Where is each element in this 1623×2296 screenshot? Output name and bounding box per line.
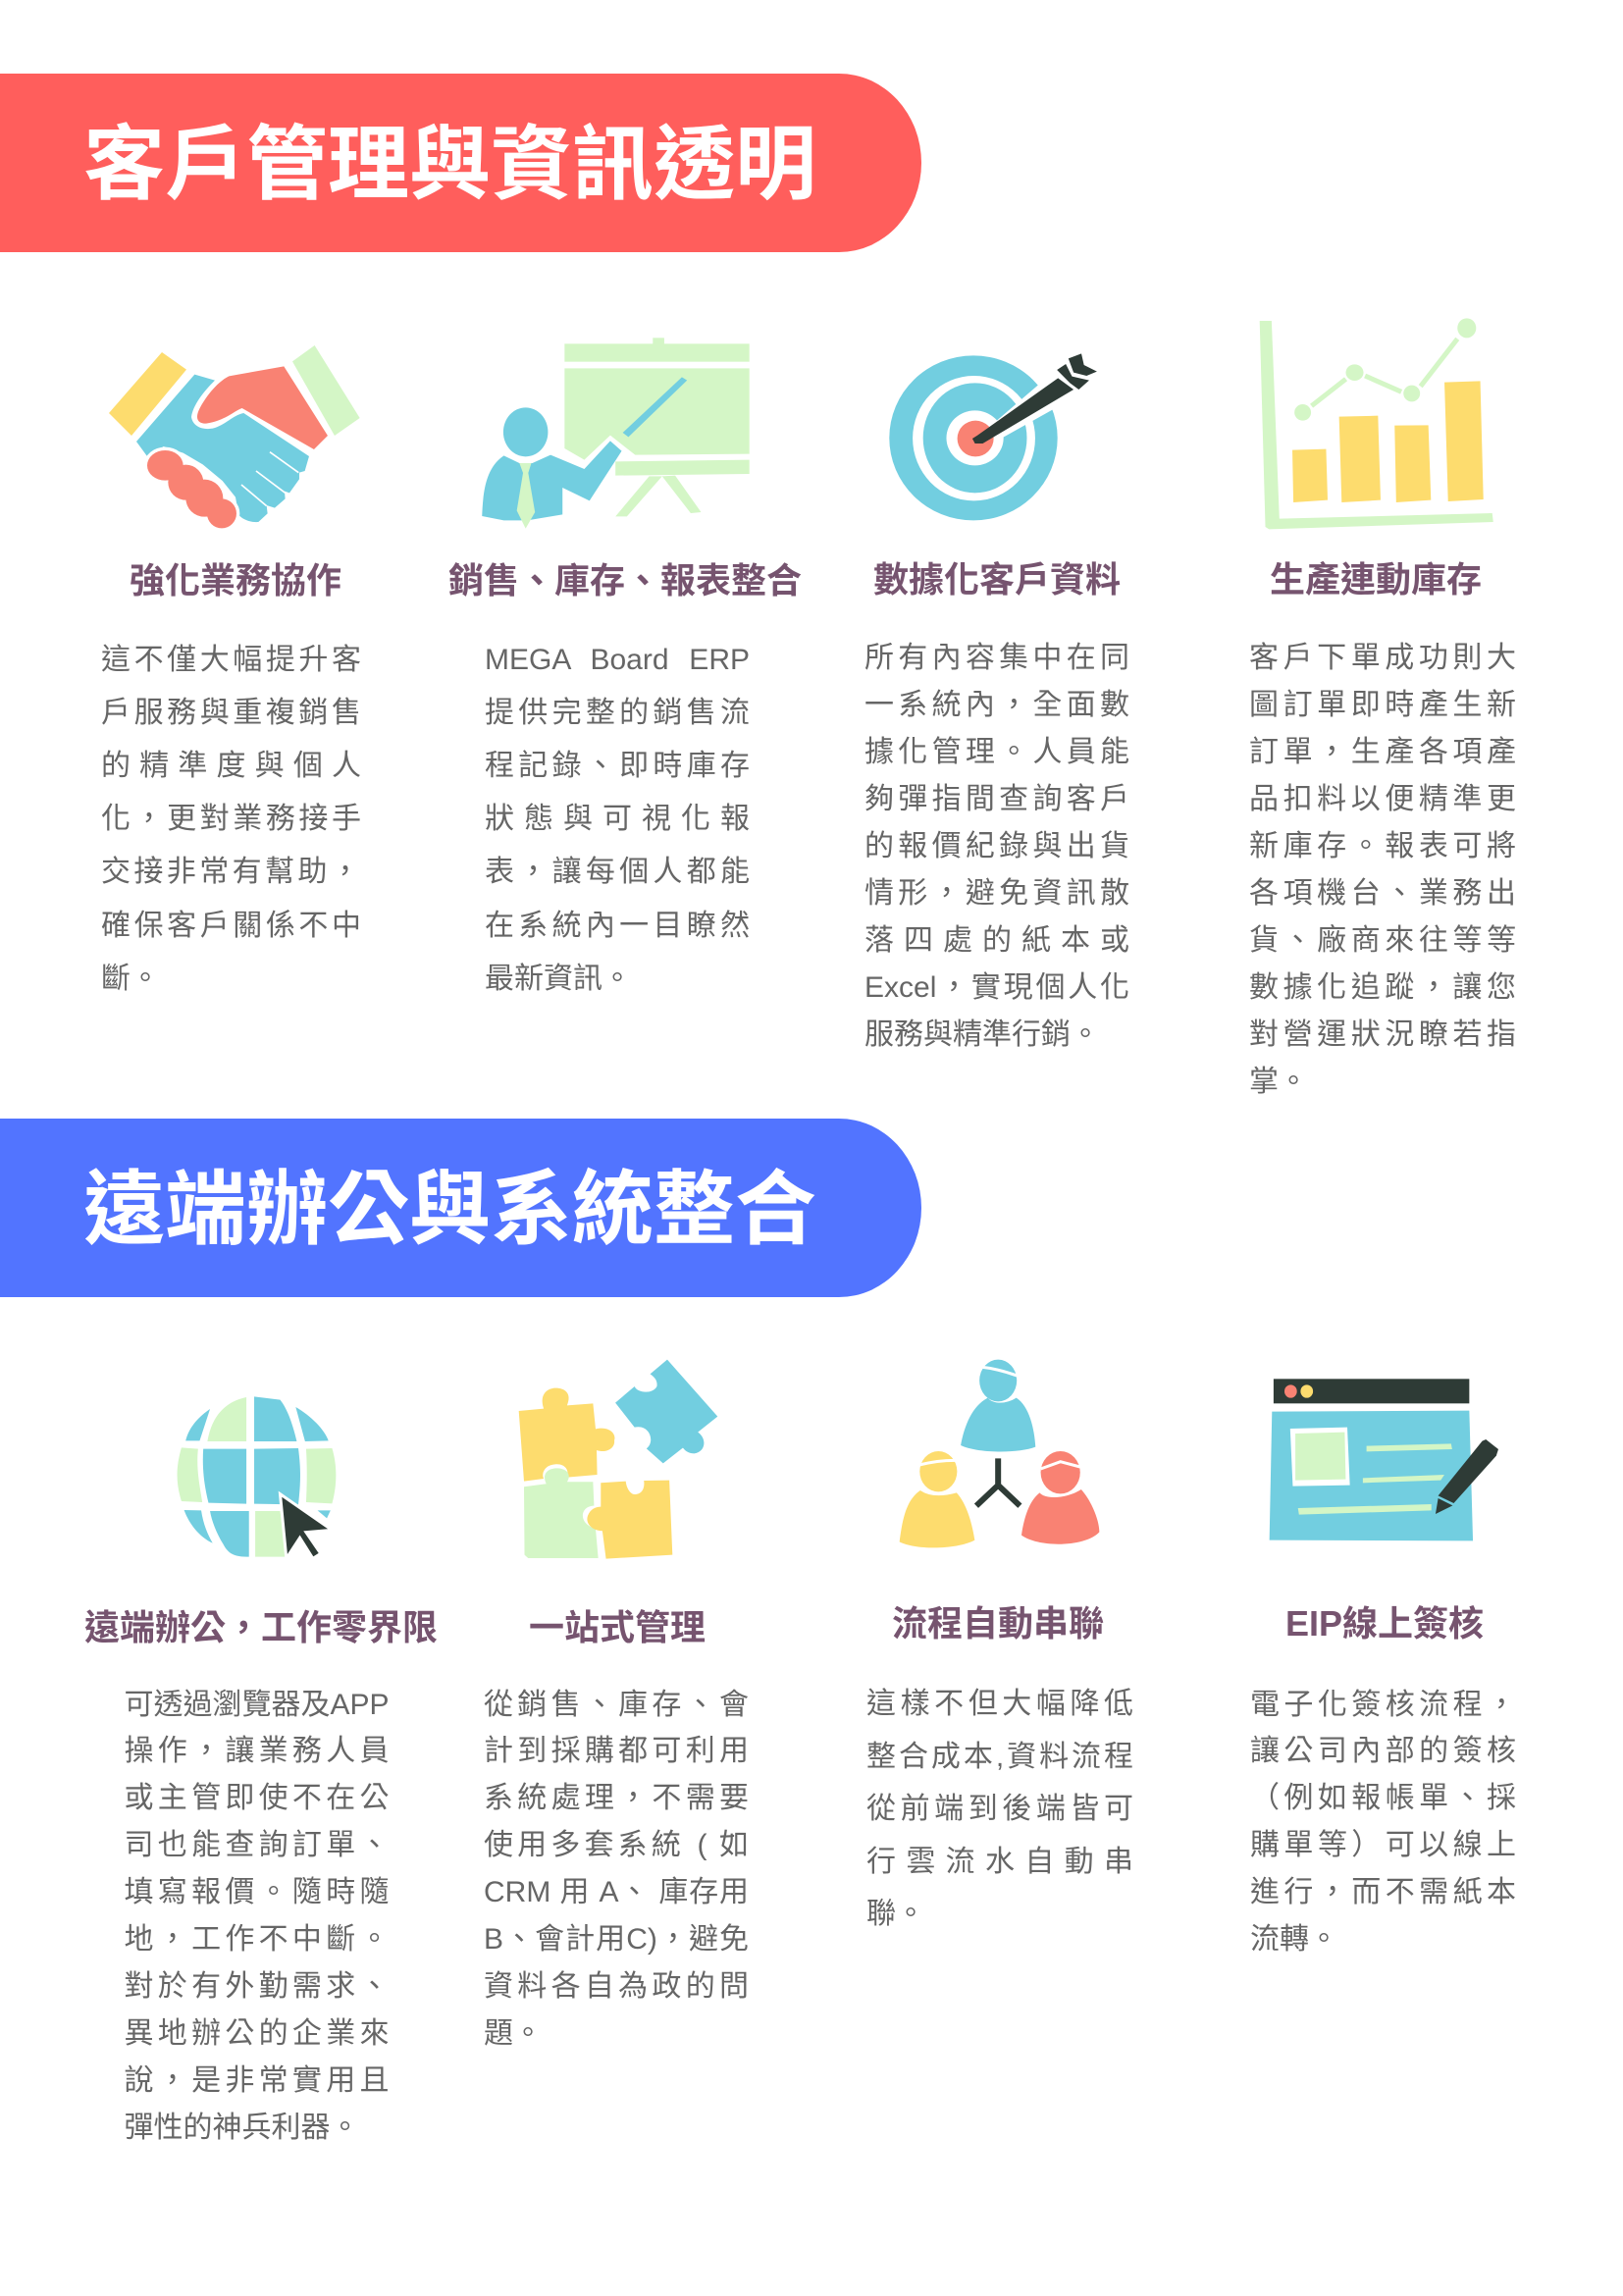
body text	[1249, 642, 1516, 1098]
body text: 圖訂單即時產生新	[1249, 689, 1516, 721]
body text: 斷。	[101, 963, 160, 995]
body text: 貨、廠商來往等等	[1249, 924, 1516, 957]
body text: 落四處的紙本或	[864, 924, 1129, 957]
title banner: customer management: 客戶管理與資訊透明	[83, 118, 816, 210]
icon: target with arrow	[889, 353, 1097, 520]
body text: 對營運狀況瞭若指	[1249, 1018, 1516, 1051]
icon: bar and line chart	[1260, 318, 1493, 530]
title banner: remote work: 遠端辦公與系統整合	[83, 1164, 816, 1254]
body text: 填寫報價。隨時隨	[124, 1876, 389, 1908]
card: strengthen business collaboration	[101, 345, 363, 995]
body text: 彈性的神兵利器。	[124, 2112, 359, 2144]
heading: 數據化客戶資料	[873, 559, 1121, 599]
heading: 流程自動串聯	[892, 1603, 1104, 1643]
body text: 題。	[484, 2017, 543, 2050]
body text: 使用多套系統 ( 如	[484, 1829, 749, 1861]
body text: B、會計用C)，避免	[484, 1923, 749, 1956]
card: EIP online approval	[1250, 1379, 1516, 1956]
card: automated process chaining	[866, 1360, 1133, 1930]
body text: 操作，讓業務人員	[124, 1735, 389, 1767]
body text: 購單等）可以線上	[1250, 1829, 1516, 1861]
icon: three connected people	[899, 1360, 1099, 1548]
title banner: remote work	[0, 1119, 921, 1297]
body text: MEGA Board ERP	[485, 644, 750, 675]
body text: 掌。	[1249, 1066, 1308, 1098]
body text: 所有內容集中在同	[864, 642, 1129, 674]
body text	[485, 644, 750, 995]
body text: CRM 用 A、 庫存用	[484, 1876, 749, 1908]
card: remote work without boundaries	[84, 1396, 438, 2144]
heading: 一站式管理	[529, 1607, 706, 1647]
body text: 狀態與可視化報	[485, 803, 750, 835]
body text: 或主管即使不在公	[124, 1782, 389, 1814]
card: sales, inventory, report integration	[448, 338, 802, 995]
body text: 品扣料以便精準更	[1249, 783, 1516, 815]
body text: 這樣不但大幅降低	[866, 1688, 1133, 1720]
heading: EIP線上簽核	[1285, 1603, 1484, 1643]
body text: 地，工作不中斷。	[124, 1923, 389, 1956]
body text: 讓公司內部的簽核	[1250, 1735, 1516, 1767]
body text: 進行，而不需紙本	[1250, 1876, 1516, 1908]
body text: 數據化追蹤，讓您	[1249, 971, 1516, 1004]
body text: 訂單，生產各項產	[1249, 736, 1516, 768]
icon: browser window with pen	[1270, 1379, 1498, 1540]
heading: 生產連動庫存	[1270, 559, 1482, 599]
body text: 從銷售、庫存、會	[484, 1688, 749, 1721]
body text: 資料各自為政的問	[484, 1970, 749, 2003]
body text: 夠彈指間查詢客戶	[864, 783, 1129, 815]
body text: 表，讓每個人都能	[485, 856, 750, 888]
body text: 這不僅大幅提升客	[101, 644, 361, 675]
body text: 系統處理，不需要	[484, 1782, 749, 1814]
icon: globe with cursor	[177, 1396, 336, 1557]
body text: 聯。	[866, 1898, 925, 1930]
body text	[101, 644, 363, 995]
title banner: customer management	[0, 74, 921, 252]
body text: 據化管理。人員能	[864, 736, 1129, 768]
icon: puzzle pieces	[518, 1360, 718, 1559]
body text: 交接非常有幫助，	[101, 856, 363, 888]
icon: presenter with board	[482, 338, 750, 528]
body text: 情形，避免資訊散	[864, 877, 1129, 910]
body text: 行雲流水自動串	[866, 1846, 1133, 1878]
body text: 異地辦公的企業來	[124, 2017, 389, 2050]
body text: 在系統內一目瞭然	[485, 910, 750, 942]
body text: 整合成本,資料流程	[866, 1741, 1133, 1773]
body text: 的精準度與個人	[101, 750, 361, 782]
body text: 程記錄、即時庫存	[485, 750, 750, 782]
body text: 的報價紀錄與出貨	[864, 830, 1129, 862]
body text: 流轉。	[1250, 1923, 1338, 1956]
body text: 對於有外勤需求、	[124, 1970, 389, 2003]
heading: 銷售、庫存、報表整合	[448, 560, 802, 600]
body text: 新庫存。報表可將	[1249, 830, 1516, 862]
body text	[124, 1688, 390, 2144]
body text: 電子化簽核流程，	[1250, 1688, 1516, 1721]
body text: 計到採購都可利用	[484, 1735, 749, 1767]
body text: 化，更對業務接手	[101, 803, 361, 835]
body text: 一系統內，全面數	[864, 689, 1129, 721]
body text: 客戶下單成功則大	[1249, 642, 1516, 674]
icon: handshake	[109, 345, 359, 528]
body text: Excel，實現個人化	[864, 971, 1129, 1004]
body text: 提供完整的銷售流	[485, 697, 750, 729]
body text: （例如報帳單、採	[1250, 1782, 1516, 1814]
body text: 最新資訊。	[485, 963, 632, 995]
body text	[864, 642, 1129, 1051]
body text: 戶服務與重複銷售	[101, 697, 361, 729]
body text: 司也能查詢訂單、	[124, 1829, 389, 1861]
heading: 強化業務協作	[130, 560, 341, 600]
body text	[866, 1688, 1133, 1930]
body text	[1250, 1688, 1516, 1956]
body text: 確保客戶關係不中	[101, 910, 361, 942]
body text: 說，是非常實用且	[124, 2064, 389, 2097]
card: one stop management	[484, 1360, 749, 2050]
card: production linked inventory	[1249, 318, 1516, 1098]
body text: 從前端到後端皆可	[866, 1793, 1133, 1825]
body text: 可透過瀏覽器及APP	[124, 1688, 390, 1721]
heading: 遠端辦公，工作零界限	[84, 1607, 438, 1647]
body text: 各項機台、業務出	[1249, 877, 1516, 910]
body text: 服務與精準行銷。	[864, 1018, 1100, 1051]
body text	[484, 1688, 749, 2050]
card: digitized customer data	[864, 353, 1129, 1051]
